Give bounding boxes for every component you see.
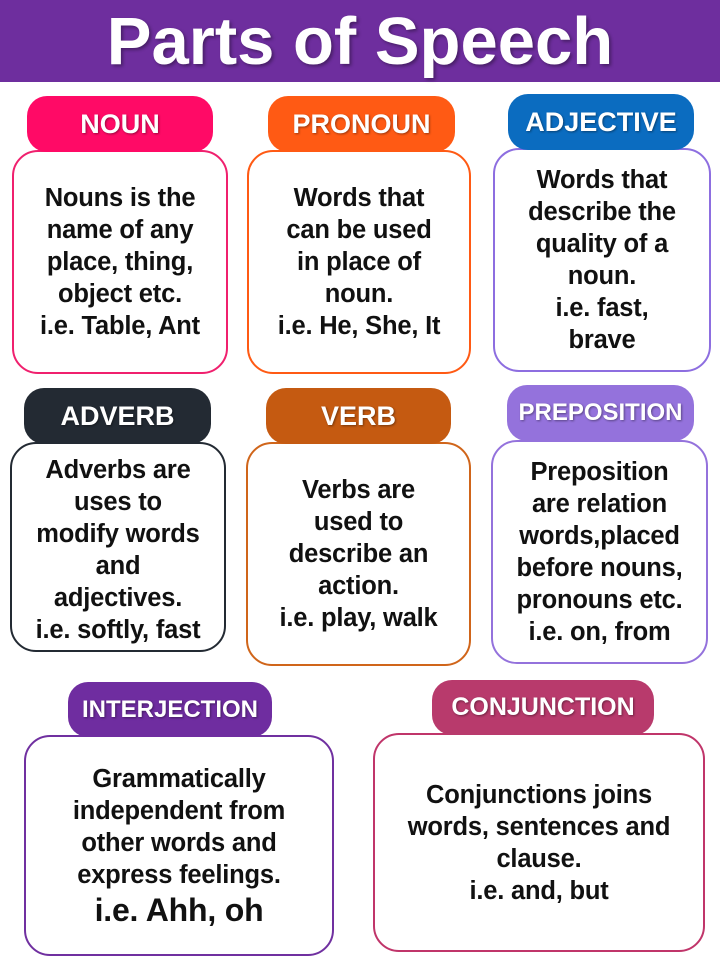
tab: pronoun [268, 96, 455, 152]
panel: conjunction: clause. [496, 844, 582, 872]
panel: noun: object etc. [58, 280, 182, 308]
panel: interjection: independent from [73, 796, 285, 824]
panel: preposition: words,placed [519, 522, 680, 550]
panel: adverb: uses to [74, 488, 162, 516]
tab: preposition [507, 385, 694, 441]
tab: verb [266, 388, 451, 444]
panel: preposition: before nouns, [516, 554, 682, 582]
panel: pronoun: Words that [294, 184, 424, 212]
panel: interjection: i.e. Ahh, oh [95, 892, 263, 928]
panel: adverb: Adverbs are [45, 456, 191, 484]
panel: adjective: describe the [528, 198, 676, 226]
tab: interjection [68, 682, 272, 737]
panel: conjunction [373, 733, 705, 952]
panel: adverb: i.e. softly, fast [36, 616, 200, 644]
panel: interjection: express feelings. [77, 860, 281, 888]
panel: conjunction: i.e. and, but [469, 876, 609, 904]
panel: adjective [493, 148, 711, 372]
panel: noun: place, thing, [47, 248, 193, 276]
tab: noun [27, 96, 213, 152]
panel: pronoun: can be used [286, 216, 432, 244]
panel: preposition: are relation [532, 490, 667, 518]
tab: conjunction: CONJUNCTION [451, 693, 635, 721]
tab: adjective: ADJECTIVE [525, 106, 677, 136]
tab: noun: NOUN [80, 108, 160, 138]
panel: preposition: Preposition [530, 458, 669, 486]
panel: verb: describe an [289, 540, 428, 568]
panel: adverb: modify words [36, 520, 200, 548]
tab: interjection: INTERJECTION [82, 696, 258, 722]
panel: verb: i.e. play, walk [279, 604, 438, 632]
panel: adjective: i.e. fast, [556, 294, 648, 322]
panel: adverb [10, 442, 226, 652]
panel: preposition: i.e. on, from [529, 618, 670, 646]
panel: interjection: other words and [81, 828, 277, 856]
panel: conjunction: Conjunctions joins [426, 780, 652, 808]
tab: pronoun: PRONOUN [292, 108, 430, 138]
panel: noun: Nouns is the [45, 184, 195, 212]
panel: verb: Verbs are [302, 476, 415, 504]
panel: noun: i.e. Table, Ant [40, 312, 200, 340]
panel: adverb: and [96, 552, 140, 580]
panel: verb [246, 442, 471, 666]
panel: preposition [491, 440, 708, 664]
tab: preposition: PREPOSITION [518, 399, 683, 426]
panel: interjection: Grammatically [92, 764, 266, 792]
title bar [0, 0, 720, 82]
panel: noun [12, 150, 228, 374]
tab: conjunction [432, 680, 654, 735]
panel: adjective: brave [568, 326, 636, 354]
panel: interjection [24, 735, 334, 956]
tab: adjective [508, 94, 694, 150]
panel: conjunction: words, sentences and [408, 812, 670, 840]
panel: adjective: noun. [568, 262, 636, 290]
panel: preposition: pronouns etc. [516, 586, 682, 614]
tab: adverb [24, 388, 211, 444]
tab: verb: VERB [321, 400, 396, 430]
panel: pronoun: in place of [297, 248, 421, 276]
panel: adjective: quality of a [536, 230, 668, 258]
panel: verb: action. [318, 572, 399, 600]
panel: pronoun [247, 150, 471, 374]
panel: adverb: adjectives. [54, 584, 182, 612]
panel: noun: name of any [47, 216, 193, 244]
panel: pronoun: i.e. He, She, It [278, 312, 440, 340]
tab: adverb: ADVERB [60, 400, 174, 430]
panel: pronoun: noun. [325, 280, 393, 308]
panel: adjective: Words that [537, 166, 667, 194]
panel: verb: used to [314, 508, 403, 536]
title bar: Parts of Speech [107, 4, 613, 79]
